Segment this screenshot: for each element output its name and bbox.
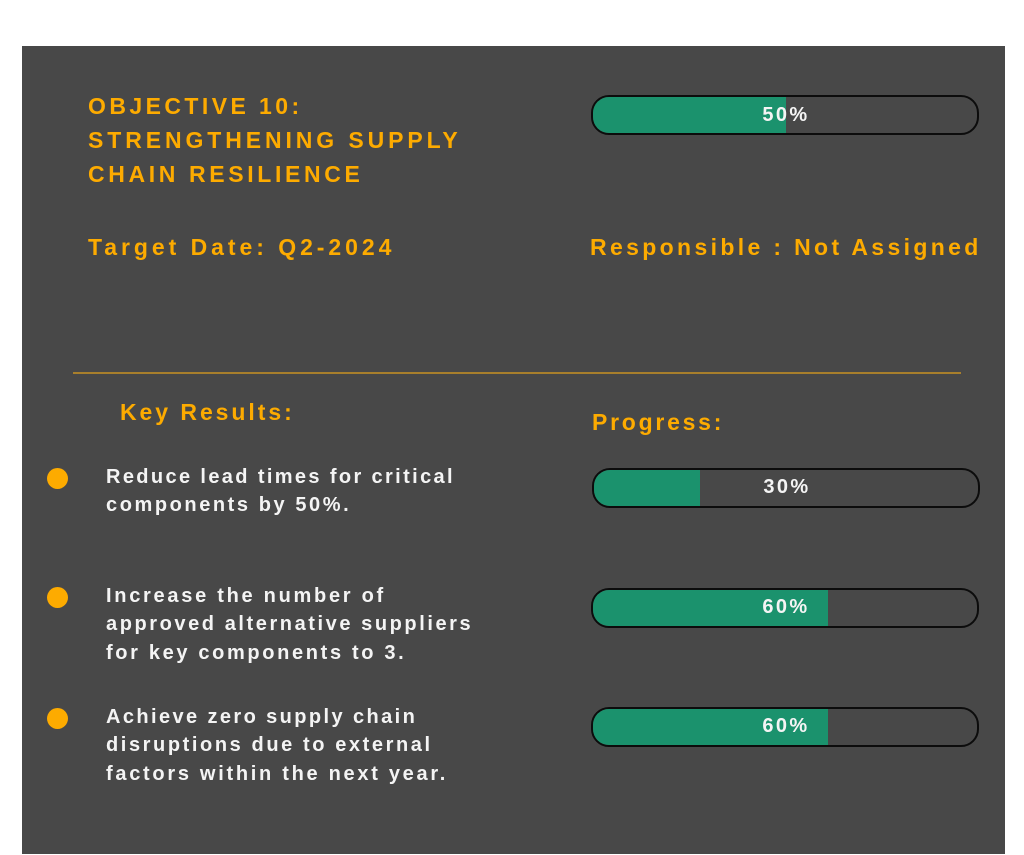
key result 3 text: disruptions due to external: [106, 734, 433, 756]
bullet 3: [47, 708, 68, 729]
key result 1 text: Reduce lead times for critical: [106, 466, 455, 488]
target date: Target Date: Q2-2024: [88, 234, 395, 260]
objective progress bar: 50%: [591, 95, 979, 135]
objective progress bar: 50%: 50%: [762, 104, 810, 126]
key result 3 text: [106, 706, 448, 785]
key result 2 progress bar: 60%: [591, 588, 979, 628]
key result 2 progress bar: 60%: 60%: [762, 596, 810, 618]
heading: key results: Key Results:: [120, 399, 295, 425]
divider: [73, 372, 961, 374]
key result 1 text: components by 50%.: [106, 494, 351, 516]
key result 3 text: Achieve zero supply chain: [106, 706, 417, 728]
title: OBJECTIVE 10:: [88, 93, 303, 119]
bullet 2: [47, 587, 68, 608]
key result 1 progress bar: 30%: 30%: [763, 476, 811, 498]
key result 3 text: factors within the next year.: [106, 763, 448, 785]
key result 1 text: [106, 466, 455, 516]
key result 3 progress bar: 60%: [591, 707, 979, 747]
title: [88, 93, 462, 187]
key result 2 text: Increase the number of: [106, 585, 386, 607]
key result 2 text: [106, 585, 473, 664]
key result 1 progress bar: 30%: [592, 468, 980, 508]
responsible: Responsible : Not Assigned: [590, 234, 982, 260]
title: STRENGTHENING SUPPLY: [88, 127, 462, 153]
key result 2 text: approved alternative suppliers: [106, 613, 473, 635]
title: CHAIN RESILIENCE: [88, 161, 363, 187]
bullet 1: [47, 468, 68, 489]
heading: progress: Progress:: [592, 409, 724, 435]
key result 2 text: for key components to 3.: [106, 642, 406, 664]
key result 3 progress bar: 60%: 60%: [762, 715, 810, 737]
